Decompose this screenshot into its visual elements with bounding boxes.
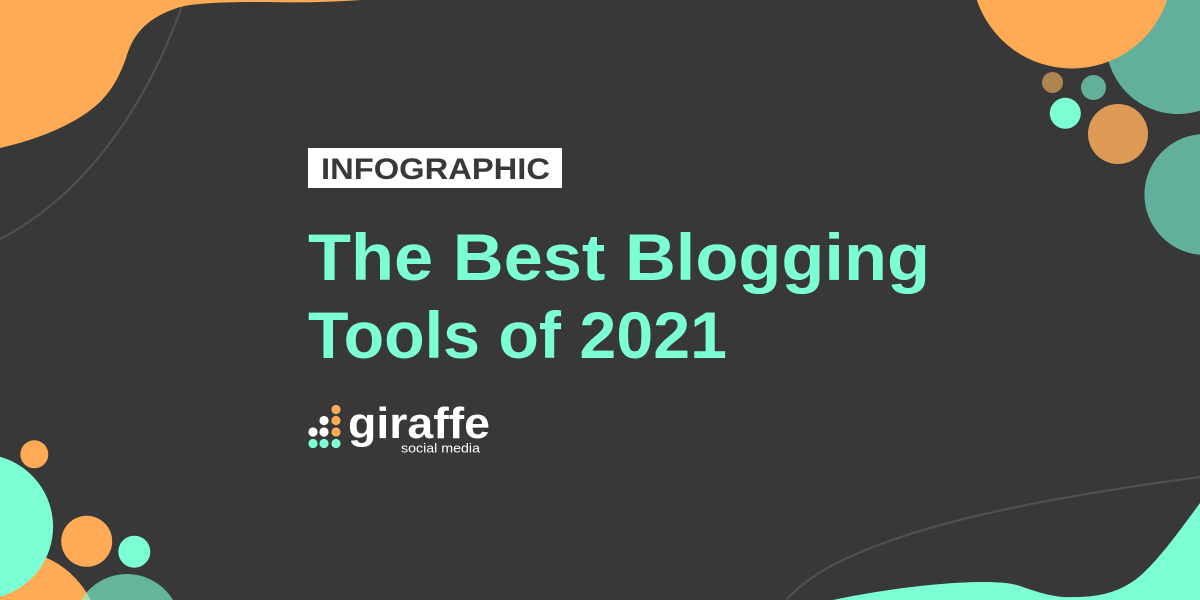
logo icon: dots <box>308 405 341 448</box>
blob: bottom right mint <box>833 503 1200 600</box>
curved line: bottom right <box>787 477 1200 599</box>
logo: giraffe social media <box>308 399 490 456</box>
curved line: top left <box>0 0 184 239</box>
title <box>308 220 930 372</box>
title: The Best Blogging <box>308 220 930 294</box>
label: infographic <box>308 148 562 188</box>
logo tagline: social media <box>401 440 481 456</box>
title: Tools of 2021 <box>308 298 727 372</box>
blob: top left orange <box>0 0 362 148</box>
circles: top right cluster <box>977 0 1200 255</box>
label: infographic: INFOGRAPHIC <box>321 153 550 186</box>
logo wordmark: giraffe <box>348 399 490 448</box>
circles: bottom left cluster <box>0 440 173 600</box>
